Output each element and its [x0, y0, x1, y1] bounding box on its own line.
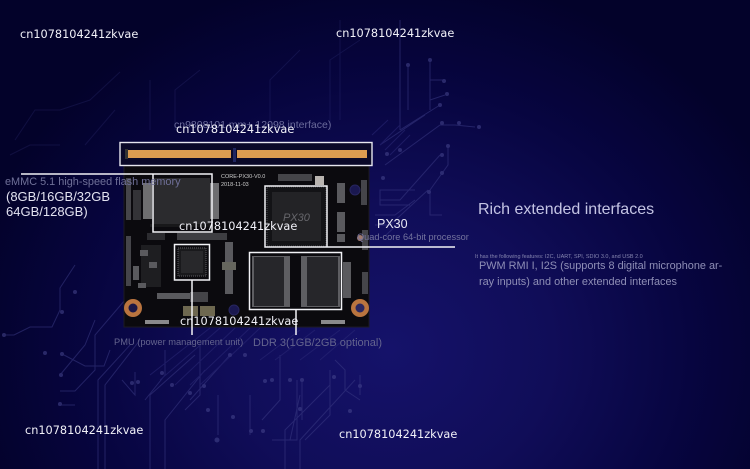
- callout box: PMU: [174, 244, 210, 335]
- chip: PMU: [178, 248, 206, 276]
- watermark board middle: cn1078104241zkvae: [179, 220, 297, 233]
- label: connector interface (faded): cn9808101 mm+ 12098 interface): [174, 119, 331, 131]
- watermark bottom centre: cn1078104241zkvae: [339, 428, 457, 441]
- label: PX30 description: Quad-core 64-bit processor: [357, 232, 469, 242]
- label: DDR: DDR 3(1GB/2GB optional): [253, 337, 382, 349]
- watermark bottom left: cn1078104241zkvae: [25, 424, 143, 437]
- mounting holes: [124, 185, 369, 317]
- watermark board bottom: cn1078104241zkvae: [180, 315, 298, 328]
- callout box: PX30: [265, 186, 455, 247]
- heading: Rich extended interfaces: Rich extended interfaces: [478, 201, 654, 218]
- watermark top left: cn1078104241zkvae: [20, 28, 138, 41]
- board silkscreen: CORE-PX30-V0.0: [221, 174, 265, 180]
- label: eMMC capacities: [6, 189, 110, 218]
- text: interface description: ray inputs) and other extended interfaces: [479, 276, 677, 288]
- label: eMMC capacities: 64GB/128GB): [6, 204, 88, 218]
- text: interface features small: It has the following features: I2C, UART, SPI, SDIO 3.0, and USB 2.0: [475, 254, 643, 260]
- callout box: DDR: [250, 252, 342, 335]
- chip: eMMC flash: [143, 178, 219, 227]
- board silkscreen: [221, 174, 265, 188]
- small surface components: [126, 174, 368, 324]
- watermark top centre: cn1078104241zkvae: [336, 27, 454, 40]
- label: eMMC capacities: (8GB/16GB/32GB: [6, 189, 110, 204]
- label: PX30: PX30: [377, 217, 408, 231]
- board silkscreen: 2018-11-03: [221, 182, 249, 188]
- callout box: eMMC: [21, 174, 212, 232]
- label: eMMC heading: eMMC 5.1 high-speed flash memory: [5, 176, 181, 188]
- chip: PX30 processor: [267, 187, 326, 246]
- board body: [124, 166, 369, 327]
- text: interface description: PWM RMI I, I2S (supports 8 digital microphone ar-: [479, 260, 722, 272]
- watermark above connector: cn1078104241zkvae: [176, 123, 294, 136]
- label: PMU: PMU (power management unit): [114, 337, 243, 347]
- edge connector: [120, 142, 372, 166]
- chip marking: PX30: PX30: [283, 212, 311, 224]
- text: interface description: [479, 260, 722, 288]
- chips: DDR memory: [252, 256, 340, 307]
